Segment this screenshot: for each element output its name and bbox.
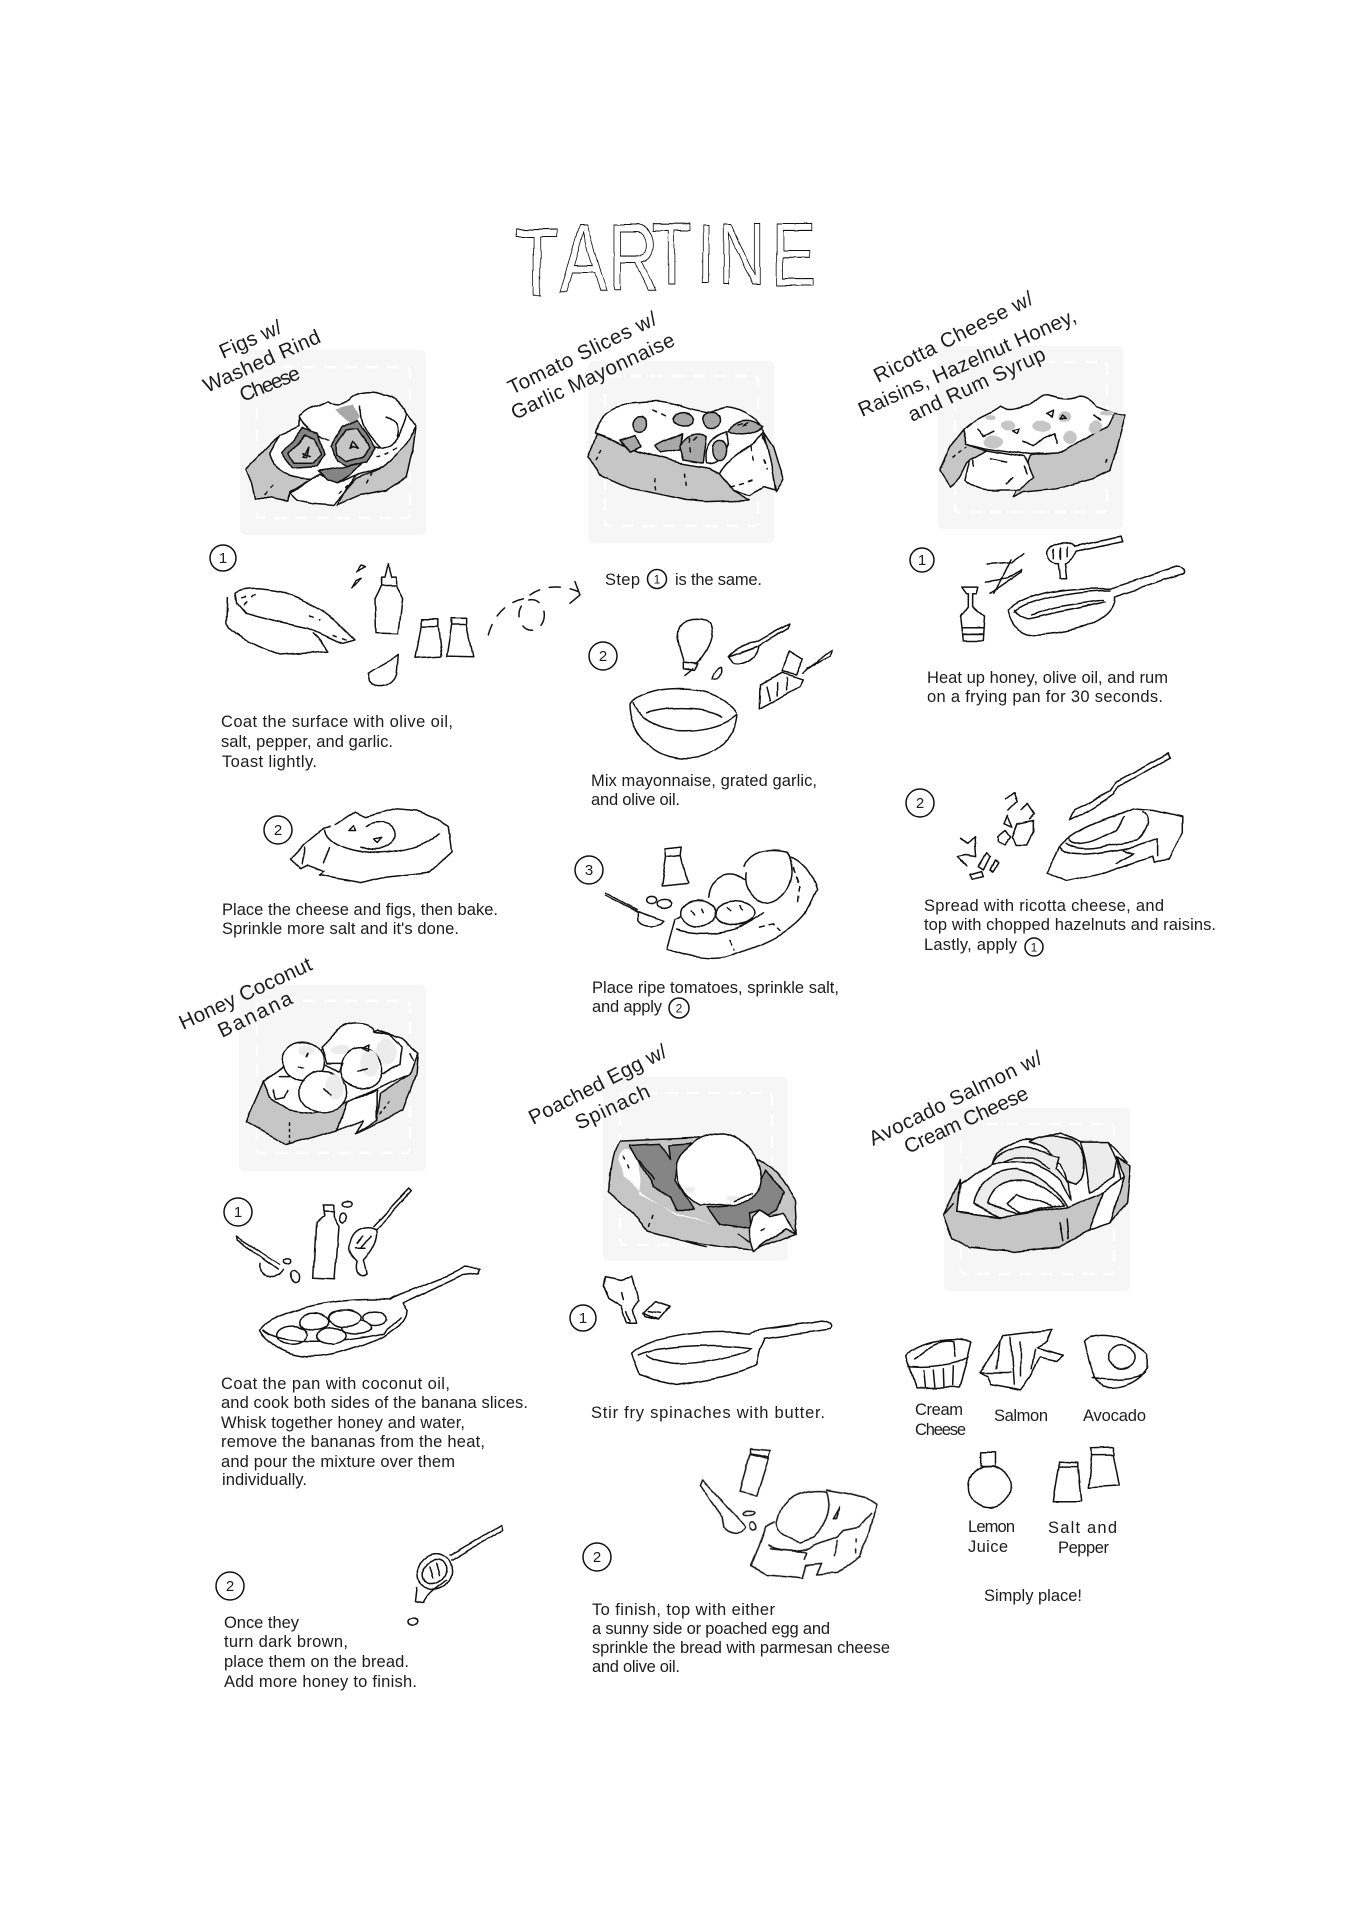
ingredient labels row 2: Juice: [968, 1538, 1008, 1556]
egg step 2 text: sprinkle the bread with parmesan cheese: [592, 1639, 890, 1657]
tomato step 2 text: and olive oil.: [591, 791, 680, 809]
ingredient labels row 2: [968, 1518, 1117, 1557]
egg step 2 number: 2: [593, 1549, 601, 1566]
banana step 1 text: and pour the mixture over them: [221, 1453, 455, 1471]
tomato step 2 number: 2: [599, 648, 607, 665]
banana heading: Honey Coconut: [175, 953, 316, 1035]
panel: ricotta cheese with raisins, hazelnut honey and rum syrup: [855, 287, 1216, 956]
banana step 2 text: turn dark brown,: [224, 1633, 348, 1651]
title: A: [559, 206, 607, 312]
ingredient labels row 1: Salmon: [994, 1407, 1048, 1425]
egg step 2 text: To finish, top with either: [592, 1601, 776, 1619]
ingredient labels row 1: Cheese: [915, 1421, 966, 1439]
avocado image tile: [944, 1108, 1130, 1291]
banana step 2 text: Add more honey to finish.: [224, 1673, 417, 1691]
banana step 2 text: [224, 1614, 417, 1691]
step 1 note: is the same.: [675, 571, 762, 589]
ricotta step 1 text: [927, 669, 1168, 706]
ricotta tartine illustration: [939, 395, 1125, 497]
tomato step 3 text: Place ripe tomatoes, sprinkle salt,: [592, 979, 839, 997]
egg heading: Poached Egg w/: [525, 1040, 671, 1129]
egg step 2 text: a sunny side or poached egg and: [592, 1620, 830, 1638]
figs step 1 text: Toast lightly.: [222, 753, 317, 771]
egg heading: Spinach: [571, 1080, 654, 1135]
figs step 2 number: 2: [274, 822, 282, 839]
avocado heading: Cream Cheese: [901, 1082, 1032, 1159]
tomato heading: Tomato Slices w/: [504, 307, 661, 399]
ricotta heading: Raisins, Hazelnut Honey,: [855, 305, 1080, 422]
ricotta step 2 number: 2: [916, 795, 924, 812]
tomato image tile: [588, 361, 774, 543]
banana step 1 text: Whisk together honey and water,: [221, 1414, 465, 1432]
banana step 1 text: and cook both sides of the banana slices.: [221, 1394, 528, 1412]
tomato step 2 text: Mix mayonnaise, grated garlic,: [591, 772, 817, 790]
tomato step 3 number: [575, 856, 603, 884]
banana step 1 text: individually.: [222, 1471, 307, 1489]
figs tartine illustration: [246, 392, 417, 505]
ricotta step 1 number: [910, 548, 934, 572]
ricotta step 2 text: top with chopped hazelnuts and raisins.: [924, 916, 1216, 934]
egg step 2 text: [592, 1601, 890, 1676]
ricotta step 2 text: Spread with ricotta cheese, and: [924, 897, 1164, 915]
ingredient labels row 1: [915, 1401, 1146, 1439]
banana step 1 text: [221, 1375, 528, 1489]
banana step 2 text: place them on the bread.: [224, 1653, 409, 1671]
egg step 1 text: Stir fry spinaches with butter.: [591, 1404, 825, 1422]
ricotta step 2 text: Lastly, apply: [924, 936, 1018, 954]
figs step 2 text: Sprinkle more salt and it's done.: [222, 920, 459, 938]
figs image tile: [240, 350, 426, 535]
banana step 2 text: Once they: [224, 1614, 300, 1632]
ingredient: cream cheese ramekin: [907, 1340, 972, 1388]
ricotta step 1 illustration: bottle, raisins, dipper, pan: [961, 537, 1185, 640]
tomato step 2 number: [589, 642, 617, 670]
tomato tartine illustration: [588, 402, 783, 502]
egg image tile: [603, 1077, 788, 1261]
banana tartine illustration: [246, 1023, 418, 1145]
panel: figs with washed rind cheese: [200, 316, 580, 938]
banana heading: Banana: [214, 986, 297, 1042]
ingredient labels row 1: Cream: [915, 1401, 963, 1419]
figs step 1 text: [221, 713, 453, 771]
panel: honey coconut banana: [175, 953, 528, 1691]
ingredient labels row 2: Pepper: [1058, 1539, 1110, 1557]
figs step 1 number: [210, 545, 236, 571]
egg step 1 number: 1: [579, 1310, 587, 1327]
banana step 2 number: 2: [226, 1578, 234, 1595]
panel: avocado salmon with cream cheese: [865, 1046, 1147, 1605]
tomato heading: Garlic Mayonnaise: [507, 328, 678, 425]
figs step 2 text: Place the cheese and figs, then bake.: [222, 901, 498, 919]
ingredient labels row 2: Salt and: [1048, 1519, 1117, 1537]
banana image tile: [239, 985, 426, 1171]
ricotta heading: and Rum Syrup: [904, 343, 1049, 427]
ricotta step 1 text: Heat up honey, olive oil, and rum: [927, 669, 1168, 687]
ricotta heading: Ricotta Cheese w/: [870, 287, 1037, 387]
panel: tomato slices with garlic mayonnaise: [504, 307, 839, 1018]
avocado heading: Avocado Salmon w/: [865, 1046, 1046, 1150]
avocado tartine illustration: [943, 1133, 1130, 1252]
banana step 2 number: [216, 1572, 244, 1600]
ingredient: salmon: [980, 1330, 1063, 1390]
tomato step 2 illustration: garlic, spoon, grater, bowl: [630, 619, 832, 758]
egg step 2 number: [583, 1543, 611, 1571]
ingredient: lemon juice bottle: [968, 1451, 1010, 1508]
egg step 2 illustration: shaker, spoon, bread with egg: [699, 1448, 877, 1578]
egg tartine illustration: [608, 1133, 797, 1252]
title: N: [719, 207, 765, 303]
banana step 1 text: Coat the pan with coconut oil,: [221, 1375, 450, 1393]
egg step 1 number: [570, 1305, 596, 1331]
tomato step 3 text: 2: [676, 1002, 683, 1016]
figs step 1 illustration: bread, oil, shakers, garlic: [227, 563, 473, 686]
ricotta step 2 text: [924, 897, 1216, 956]
banana step 1 number: [224, 1198, 252, 1226]
ingredient labels row 1: Avocado: [1083, 1407, 1146, 1425]
figs step 2 text: [222, 901, 498, 938]
figs heading: Cheese: [236, 362, 303, 407]
figs step 2 number: [264, 816, 292, 844]
ingredient labels row 2: Lemon: [968, 1518, 1015, 1536]
title: T: [515, 210, 559, 318]
title: E: [771, 204, 816, 305]
figs step 1 text: Coat the surface with olive oil,: [221, 713, 453, 731]
banana step 2 illustration: honey dipper: [408, 1525, 503, 1624]
banana step 1 illustration: spoon, bottle, dipper, pan with slices: [236, 1188, 480, 1356]
egg step 1 illustration: spinach, butter, pan: [603, 1277, 832, 1385]
panel: poached egg with spinach: [525, 1040, 890, 1676]
tomato step 2 text: [591, 772, 817, 809]
ingredient: avocado: [1085, 1335, 1147, 1387]
tomato step 3 illustration: [605, 847, 817, 958]
ricotta step 1 text: on a frying pan for 30 seconds.: [927, 688, 1163, 706]
step 1 note: 1: [654, 572, 661, 586]
figs step 1 text: salt, pepper, and garlic.: [221, 733, 393, 751]
title: R: [608, 205, 659, 310]
tomato step 3 text: [592, 979, 839, 1018]
tomato step 3 text: and apply: [592, 998, 663, 1016]
figs heading: Washed Rind: [200, 325, 324, 398]
ricotta step 1 number: 1: [918, 552, 926, 569]
ricotta step 2 illustration: nuts, knife, bread: [958, 753, 1183, 882]
banana step 1 number: 1: [234, 1204, 242, 1221]
step 1 note: [605, 570, 762, 589]
figs step 2 illustration: [290, 808, 452, 883]
title: I: [697, 208, 714, 300]
step 1 note: Step: [605, 571, 640, 589]
banana step 1 text: remove the bananas from the heat,: [221, 1433, 485, 1451]
title: T: [651, 204, 691, 304]
egg step 2 text: and olive oil.: [592, 1658, 680, 1676]
ricotta image tile: [938, 346, 1123, 529]
ricotta step 2 text: 1: [1031, 940, 1038, 954]
avocado instruction: Simply place!: [984, 1587, 1082, 1605]
ricotta step 2 number: [906, 789, 934, 817]
figs heading: Figs w/: [216, 316, 286, 364]
ingredient: salt and pepper shakers: [1053, 1447, 1119, 1501]
arrow to next recipe: [488, 582, 580, 635]
figs step 1 number: 1: [219, 550, 227, 567]
tomato step 3 number: 3: [585, 862, 593, 879]
